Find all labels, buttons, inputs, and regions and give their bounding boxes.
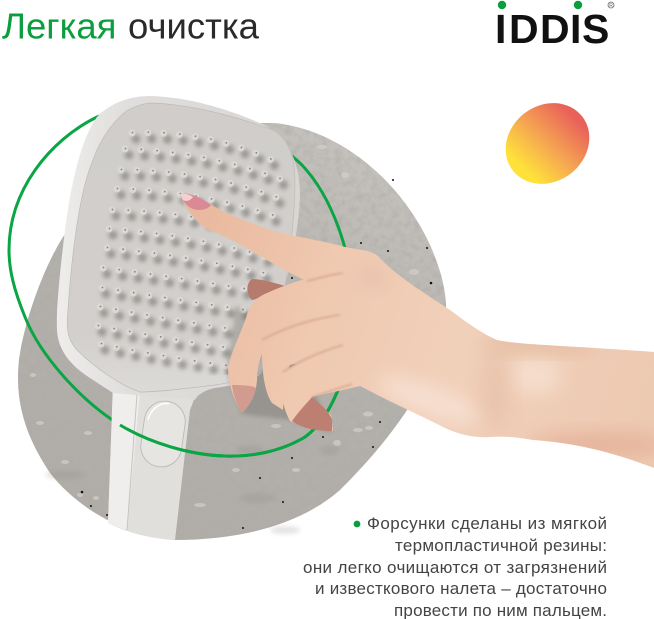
- description text: они легко очищаются от загрязнений: [303, 558, 607, 577]
- little fingertip nail: [292, 397, 332, 431]
- palm, index finger and arm: [181, 196, 654, 468]
- handle button: [138, 398, 188, 470]
- IDDIS logo: IDDIS: [495, 6, 609, 52]
- skin shading: [380, 338, 654, 460]
- shower handle: [108, 385, 195, 540]
- hand shadow: [226, 305, 332, 432]
- green outline curve: [9, 108, 353, 456]
- middle finger: [228, 272, 380, 413]
- ring finger: [262, 312, 380, 410]
- finger crease shadows: [262, 273, 352, 397]
- shower head: [57, 96, 300, 400]
- nozzles: [98, 132, 284, 373]
- green outline over handle: [120, 310, 353, 456]
- IDDIS logo: R: [609, 3, 613, 9]
- hand pointing at nozzles: [180, 194, 654, 468]
- title: очистка: [128, 6, 260, 46]
- description text: и известкового налета – достаточно: [315, 579, 607, 598]
- head face: [67, 103, 295, 392]
- thumb: [247, 279, 292, 300]
- middle fingertip nail: [232, 385, 256, 413]
- description text: [303, 514, 607, 619]
- head rim: [57, 96, 300, 400]
- description text: Форсунки сделаны из мягкой: [367, 514, 607, 533]
- panel: stone background blob: [18, 123, 446, 540]
- gradient blob accent: [489, 86, 606, 201]
- description text: термопластичной резины:: [395, 536, 607, 555]
- index fingernail: [180, 194, 211, 210]
- title: Легкая: [2, 6, 116, 46]
- little finger: [281, 338, 370, 431]
